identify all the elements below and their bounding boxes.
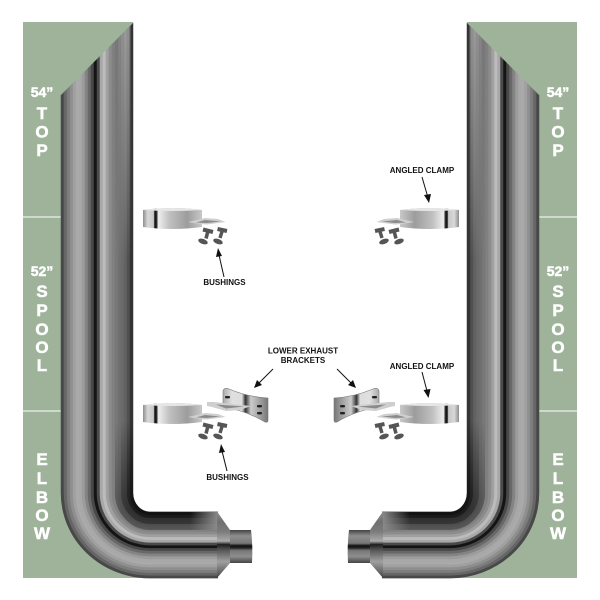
left labels: elbow (34, 450, 51, 543)
upper left bushings (197, 229, 227, 246)
right labels: elbow: W (550, 524, 567, 543)
right labels: 52 inch spool: O (551, 320, 565, 339)
arrow: right lower bracket (337, 369, 356, 388)
right labels: 54 inch top: 54” (547, 84, 569, 100)
right labels: 54 inch top: O (551, 122, 565, 142)
right labels: 52 inch spool: P (552, 301, 564, 320)
arrow: upper bushings (216, 248, 224, 277)
left labels: 52 inch spool: O (35, 338, 49, 357)
label: bushings upper: BUSHINGS (203, 278, 246, 287)
lower left clamp (143, 403, 226, 424)
upper right clamp (376, 208, 459, 229)
right labels: 52 inch spool: O (551, 338, 565, 357)
right labels: elbow: O (551, 506, 565, 525)
lower right bushings (375, 424, 405, 441)
lower right clamp (376, 403, 459, 424)
left labels: 54 inch top: O (35, 122, 49, 142)
right labels: elbow (550, 450, 567, 543)
left exhaust pipe (62, 20, 252, 578)
arrow: lower bushings (219, 444, 227, 471)
right labels: 54 inch top: T (553, 104, 564, 123)
left labels: elbow: O (35, 506, 49, 525)
left labels: 52 inch spool: 52” (31, 263, 53, 279)
right labels: 54 inch top: P (552, 141, 564, 160)
label: angled clamp upper: ANGLED CLAMP (390, 166, 455, 175)
right labels: 52 inch spool (547, 263, 569, 375)
left labels: 52 inch spool: O (35, 320, 49, 339)
label: bushings lower: BUSHINGS (206, 473, 249, 482)
label: angled clamp lower: ANGLED CLAMP (390, 362, 455, 371)
left labels: 54 inch top: P (36, 141, 48, 160)
left labels: 52 inch spool: L (37, 356, 47, 375)
right exhaust pipe (348, 20, 538, 578)
right labels: 52 inch spool: S (552, 282, 564, 301)
arrow: lower angled clamp (422, 372, 430, 398)
left labels: 54 inch top (31, 84, 53, 160)
right labels: elbow: L (553, 469, 563, 488)
left labels: 54 inch top: 54” (31, 84, 53, 100)
lower left bracket (207, 388, 268, 422)
label: lower exhaust brackets: LOWER EXHAUST (268, 346, 338, 356)
arrow: left lower bracket (254, 369, 273, 388)
lower left bushings (197, 424, 227, 441)
right labels: 52 inch spool: 52” (547, 263, 569, 279)
left labels: 54 inch top: T (37, 104, 48, 123)
left labels: 52 inch spool: P (36, 301, 48, 320)
right labels: elbow: E (552, 450, 564, 469)
upper right bushings (375, 229, 405, 246)
left labels: elbow: B (36, 488, 48, 507)
right labels: 54 inch top (547, 84, 569, 160)
label: lower exhaust brackets: BRACKETS (281, 356, 326, 365)
right labels: elbow: B (552, 488, 564, 507)
panel: left green measurement strip (23, 22, 150, 578)
left labels: elbow: E (36, 450, 48, 469)
left labels: 52 inch spool (31, 263, 53, 375)
right labels: 52 inch spool: L (553, 356, 563, 375)
arrow: upper angled clamp (422, 177, 431, 203)
upper left clamp (143, 208, 226, 229)
left labels: elbow: W (34, 524, 51, 543)
panel: right green measurement strip (450, 22, 577, 578)
left labels: elbow: L (37, 469, 47, 488)
lower right bracket (334, 388, 395, 422)
left labels: 52 inch spool: S (36, 282, 48, 301)
